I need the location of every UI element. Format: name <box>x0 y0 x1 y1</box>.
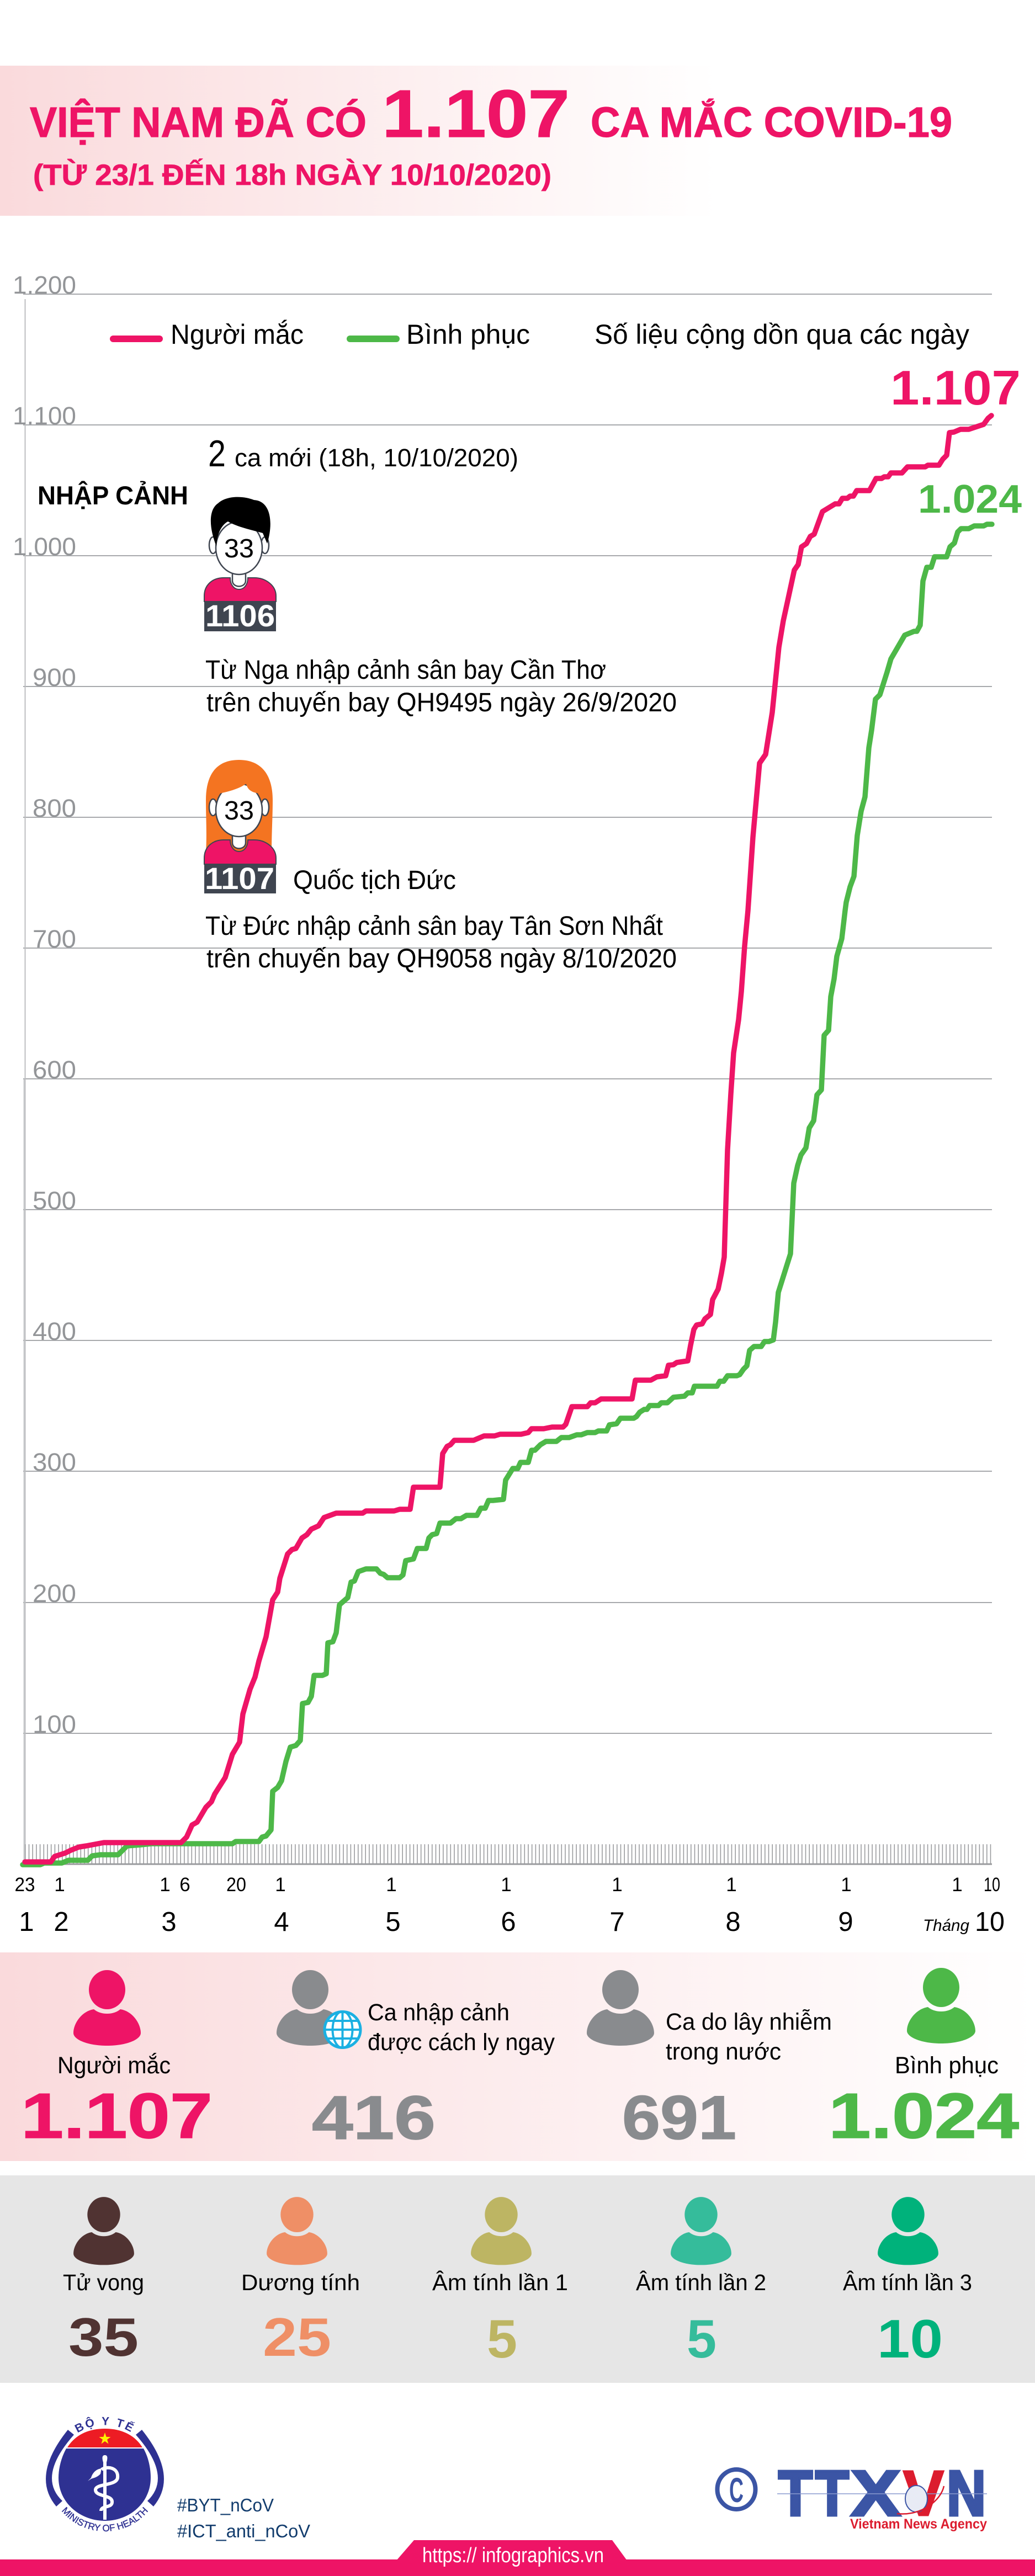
title: CA MẮC COVID-19 <box>591 98 952 146</box>
x axis month labels: 10 <box>975 1907 1005 1937</box>
label: recovered: Bình phục <box>895 2052 999 2079</box>
patient 1107 text <box>205 866 677 973</box>
y axis labels: 100 <box>33 1710 76 1738</box>
x axis month labels: 8 <box>725 1907 741 1937</box>
x axis day labels: 6 <box>179 1874 190 1896</box>
x axis day labels: 1 <box>54 1874 65 1896</box>
y axis labels: 900 <box>33 663 76 691</box>
x axis month labels: Tháng <box>923 1917 969 1935</box>
logo: copyright symbol <box>718 2469 755 2510</box>
logo: TTXVN: V <box>903 2457 944 2529</box>
subtitle: (TỪ 23/1 ĐẾN 18h NGÀY 10/10/2020) <box>33 158 551 191</box>
label: negative twice: Âm tính lần 2 <box>636 2270 766 2295</box>
icon: negative once <box>471 2197 532 2265</box>
value: recovered: 1.024 <box>829 2080 1019 2152</box>
x axis month labels: 6 <box>501 1907 516 1937</box>
y axis labels: 700 <box>33 925 76 953</box>
value: infected: 1.107 <box>21 2080 213 2152</box>
icon: globe <box>325 2011 360 2048</box>
x axis day labels: 1 <box>841 1874 852 1896</box>
footer bar <box>0 2540 1035 2576</box>
y axis labels: 200 <box>33 1579 76 1608</box>
logo: ministry of health <box>46 2417 164 2532</box>
end value infected: 1.107 <box>890 360 1021 415</box>
y axis labels: 1.200 <box>13 271 76 299</box>
label: positive: Dương tính <box>241 2270 360 2295</box>
icon: positive <box>267 2197 327 2265</box>
text: Vietnam News Agency: Vietnam News Agency <box>850 2516 987 2532</box>
new cases note: 2 <box>208 433 226 475</box>
icon: deaths <box>73 2197 134 2265</box>
icon: infected person <box>73 1970 141 2046</box>
logo: TTXVN <box>777 2457 987 2529</box>
legend: Số liệu cộng dồn qua các ngày <box>595 319 969 350</box>
logo: TTXVN: N <box>947 2457 986 2529</box>
x axis month labels: 9 <box>838 1907 853 1937</box>
label: imported <box>368 1999 555 2056</box>
x axis month labels: 7 <box>609 1907 625 1937</box>
x axis day labels <box>14 1874 1000 1896</box>
x axis day labels: 1 <box>275 1874 286 1896</box>
y axis labels: 800 <box>33 794 76 822</box>
x axis day labels: 1 <box>386 1874 397 1896</box>
legend: Người mắc <box>171 319 304 350</box>
value: positive: 25 <box>263 2307 331 2367</box>
x axis day labels: 1 <box>952 1874 963 1896</box>
patient 1107 icon: 1107 <box>205 861 274 896</box>
x axis month labels <box>19 1907 1005 1937</box>
logo: TTXVN: T <box>778 2457 813 2529</box>
icon: recovered person <box>907 1968 975 2043</box>
logo: TTXVN: T <box>815 2457 849 2529</box>
infected curve <box>25 416 991 1862</box>
title: 1.107 <box>382 76 570 151</box>
value: negative twice: 5 <box>687 2308 716 2369</box>
new cases note: ca mới (18h, 10/10/2020) <box>235 444 518 472</box>
x axis month labels: 4 <box>274 1907 289 1937</box>
y axis labels: 400 <box>33 1317 76 1345</box>
title <box>30 76 952 151</box>
y axis labels: 500 <box>33 1186 76 1215</box>
patient 1107 text: Từ Đức nhập cảnh sân bay Tân Sơn Nhất <box>205 912 663 941</box>
y axis grid lines <box>23 294 992 1864</box>
title: VIỆT NAM ĐÃ CÓ <box>30 98 367 146</box>
x axis month labels: 5 <box>385 1907 401 1937</box>
patient 1106 text <box>205 656 677 717</box>
y axis labels: 300 <box>33 1448 76 1476</box>
icon: domestic person <box>587 1970 654 2046</box>
patient 1107 text: trên chuyến bay QH9058 ngày 8/10/2020 <box>206 944 677 973</box>
label: domestic: Ca do lây nhiễm <box>666 2009 832 2035</box>
icon: negative three times <box>878 2197 938 2265</box>
label: infected: Người mắc <box>57 2052 171 2079</box>
patient 1106 text: trên chuyến bay QH9495 ngày 26/9/2020 <box>206 688 677 717</box>
label: deaths: Tử vong <box>63 2270 144 2295</box>
hashtags: #BYT_nCoV <box>177 2495 274 2515</box>
patient 1107 icon <box>204 760 276 896</box>
patient 1107 text: Quốc tịch Đức <box>293 866 456 895</box>
y axis labels: 1.100 <box>13 402 76 430</box>
patient 1106 icon: 1106 <box>205 598 275 633</box>
icon: negative twice <box>671 2197 731 2265</box>
label: imported: được cách ly ngay <box>368 2029 555 2056</box>
label: negative three times: Âm tính lần 3 <box>843 2270 972 2295</box>
value: deaths: 35 <box>68 2307 139 2367</box>
y axis labels: 1.000 <box>13 533 76 561</box>
legend: Bình phục <box>406 319 530 350</box>
patient 1107 icon: 33 <box>224 796 254 826</box>
label: domestic <box>666 2009 832 2065</box>
patient 1106 icon: 33 <box>224 534 254 563</box>
legend <box>113 319 969 350</box>
y axis labels: 600 <box>33 1056 76 1084</box>
x axis ticks <box>25 1854 992 1864</box>
x axis month labels: 2 <box>54 1907 69 1937</box>
x axis day labels: 10 <box>984 1874 1000 1896</box>
x axis day labels: 1 <box>612 1874 623 1896</box>
label: domestic: trong nước <box>666 2039 781 2065</box>
end value recovered: 1.024 <box>918 477 1022 521</box>
heading: imported: NHẬP CẢNH <box>38 481 188 510</box>
logo: ministry of health: MINISTRY OF HEALTH <box>62 2506 148 2532</box>
label: negative once: Âm tính lần 1 <box>432 2270 568 2295</box>
patient 1106 text: Từ Nga nhập cảnh sân bay Cần Thơ <box>205 656 606 685</box>
hashtags: #ICT_anti_nCoV <box>177 2521 310 2541</box>
value: negative once: 5 <box>487 2308 517 2369</box>
x axis day labels: 20 <box>226 1874 246 1896</box>
x axis month labels: 3 <box>161 1907 177 1937</box>
hashtags <box>177 2495 310 2541</box>
x axis day labels: 1 <box>726 1874 737 1896</box>
header banner <box>0 66 952 216</box>
value: domestic: 691 <box>622 2083 736 2152</box>
logo: ministry of health: BỘ Y TẾ <box>74 2417 135 2433</box>
logo: copyright symbol: C <box>729 2471 744 2510</box>
value: imported: 416 <box>312 2083 436 2152</box>
recovered curve <box>23 524 992 1865</box>
footer url: https:// infographics.vn <box>422 2544 604 2567</box>
y axis labels <box>13 271 76 1738</box>
icon: imported person <box>277 1970 344 2046</box>
label: imported: Ca nhập cảnh <box>368 1999 509 2026</box>
new cases note <box>208 433 518 475</box>
value: negative three times: 10 <box>877 2308 943 2369</box>
panel: patient status <box>0 2175 1035 2383</box>
line chart: cumulative cases <box>13 271 1022 1937</box>
logo: TTXVN: X <box>851 2457 900 2529</box>
x axis day labels: 1 <box>501 1874 512 1896</box>
x axis day labels: 23 <box>14 1874 35 1896</box>
x axis day labels: 1 <box>160 1874 171 1896</box>
patient 1106 icon <box>204 497 276 633</box>
panel: totals <box>0 1952 1035 2161</box>
x axis month labels: 1 <box>19 1907 34 1937</box>
